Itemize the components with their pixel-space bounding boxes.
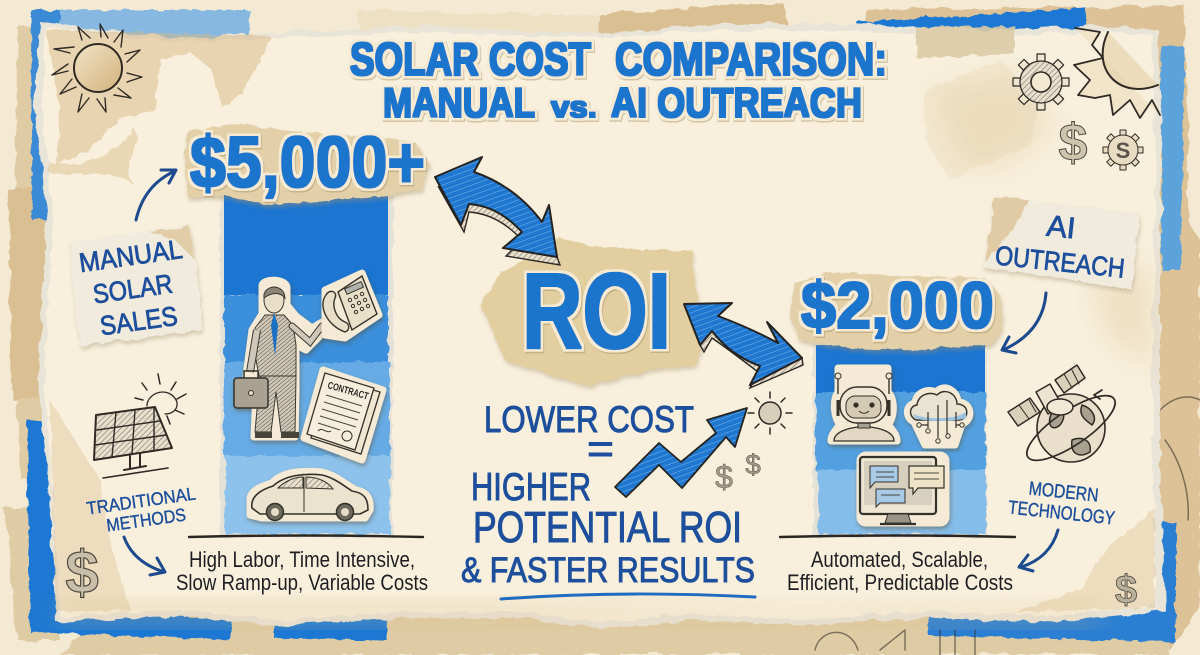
arrow: AI outreach to price (1002, 293, 1046, 353)
title: COMPARISON: (615, 33, 887, 85)
icon: contract (304, 370, 383, 460)
text: lower cost equals higher potential ROI: & FASTER RESULTS (461, 551, 755, 590)
note text: OUTREACH (994, 240, 1126, 284)
icon: dollar bottom right: $ (1115, 568, 1137, 612)
icon: dollar gear (1103, 130, 1143, 170)
arrow: modern technology to caption (1019, 530, 1058, 571)
column torn white edge (813, 345, 987, 537)
icon: dollar bottom left: $ (65, 539, 99, 606)
caption: AI costs: Efficient, Predictable Costs (787, 570, 1013, 595)
panel: manual cost column (220, 195, 393, 537)
icon: small sun (748, 392, 792, 434)
large gear (1074, 28, 1160, 118)
icon: dollars near growth arrow (715, 449, 761, 495)
underline (501, 594, 755, 599)
note text: SOLAR (91, 269, 174, 310)
icon: robot (831, 368, 897, 441)
label: traditional methods: METHODS (105, 505, 187, 536)
icon: contract: CONTRACT (326, 380, 370, 402)
note stain (985, 197, 1030, 262)
note text (77, 234, 184, 341)
icon: monitor with chat bubbles (860, 455, 946, 524)
column band 4 (225, 456, 390, 534)
label: traditional methods (85, 484, 197, 536)
icon: cloud (907, 388, 970, 445)
label: traditional methods: TRADITIONAL (85, 484, 197, 519)
title: SOLAR COST (350, 33, 591, 85)
panel: ROI (480, 238, 703, 385)
title (350, 33, 887, 126)
text: lower cost equals higher potential ROI: HIGHER (471, 466, 591, 509)
tag value: $2,000 (801, 268, 994, 342)
note text: MANUAL (77, 234, 184, 278)
tag paper (790, 272, 1002, 350)
sketch lines on bottom paper (815, 397, 1200, 655)
note text (994, 210, 1126, 284)
arrow: manual sales to price (136, 170, 176, 220)
icon: solar panel with sun (94, 374, 186, 478)
note paper (70, 225, 203, 346)
note paper (983, 197, 1140, 290)
icon: satellite and globe (1008, 365, 1124, 471)
icon: businessman (234, 280, 326, 438)
price tag: $5,000+ (184, 123, 430, 205)
note stain (150, 226, 195, 260)
arrow: double arrow ROI to price (684, 303, 803, 388)
caption: manual costs: Slow Ramp-up, Variable Costs (176, 570, 428, 595)
label: modern technology: MODERN (1028, 478, 1099, 507)
note text: AI (1045, 210, 1077, 245)
icon: dollars near growth arrow: $ (745, 449, 761, 480)
text: lower cost equals higher potential ROI (461, 399, 755, 590)
small gear (1013, 54, 1069, 110)
column band 3 (818, 470, 986, 534)
baseline left (189, 536, 423, 537)
title: vs. (551, 91, 597, 124)
tape (916, 26, 1015, 58)
column band 1 (224, 195, 388, 295)
text: lower cost equals higher potential ROI: POTENTIAL ROI (473, 503, 742, 552)
baseline right (780, 536, 1015, 537)
note: AI outreach (983, 197, 1140, 290)
ROI paper (480, 238, 703, 385)
panel: AI cost column (813, 345, 987, 537)
note text: SALES (98, 301, 179, 341)
caption: manual costs (176, 547, 428, 595)
note: manual solar sales (70, 225, 203, 346)
title: MANUAL (383, 79, 535, 126)
tag paper (184, 124, 430, 205)
icon: telephone (323, 273, 379, 338)
icon: car (250, 471, 370, 520)
column torn white edge (220, 195, 393, 537)
arrow: double arrow price to ROI (435, 157, 560, 265)
label: modern technology: TECHNOLOGY (1007, 497, 1116, 530)
icon: dollars near growth arrow: $ (715, 459, 733, 495)
column band 1 (816, 345, 985, 395)
caption: manual costs: High Labor, Time Intensive, (189, 547, 415, 572)
icon: gears top right (1013, 28, 1160, 118)
column band 2 (224, 295, 388, 364)
text: lower cost equals higher potential ROI: LOWER COST (484, 399, 694, 440)
icon: dollar gear: S (1116, 138, 1130, 163)
caption: AI costs (787, 547, 1013, 595)
caption: AI costs: Automated, Scalable, (811, 547, 988, 572)
label: modern technology (1007, 478, 1116, 530)
tag value: $5,000+ (190, 123, 425, 203)
column band 3 (224, 362, 390, 456)
arrow: rising growth (615, 408, 747, 497)
icon: dollar top right: $ (1059, 114, 1088, 172)
arrow: traditional methods to caption (124, 537, 165, 575)
icon: sun top left (52, 24, 142, 112)
title: AI OUTREACH (611, 79, 862, 126)
column band 2 (816, 392, 986, 472)
ROI text: ROI (522, 250, 671, 371)
price tag: $2,000 (790, 268, 1002, 350)
text: lower cost equals higher potential ROI: = (587, 425, 614, 472)
